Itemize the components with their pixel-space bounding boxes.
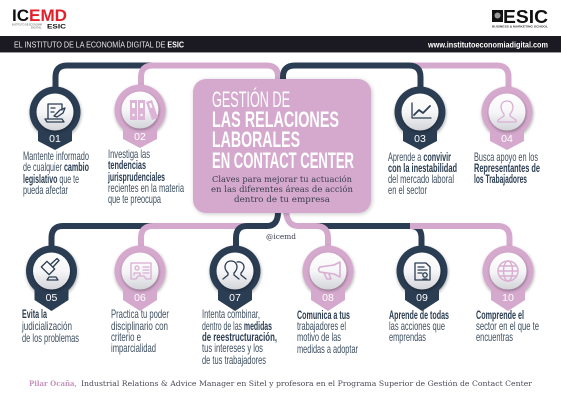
text 07 <box>202 308 277 367</box>
text 10: Comprende el <box>476 309 524 322</box>
text 03: Aprende a convivir <box>388 151 451 164</box>
text 01: Mantente informado <box>23 150 89 163</box>
text 07: Intenta combinar, <box>202 308 260 321</box>
icon: line chart <box>412 103 431 118</box>
text 03: del mercado laboral <box>388 173 454 186</box>
text 01: de cualquier cambio <box>23 161 89 174</box>
subtitle <box>211 174 353 205</box>
text 08: motivo de las <box>297 331 341 344</box>
header band <box>0 36 561 53</box>
icon: id card <box>131 263 151 279</box>
step 03 <box>394 86 446 150</box>
step 10 <box>482 246 534 311</box>
text 08: trabajadores el <box>297 320 346 333</box>
icon: globe <box>498 261 518 281</box>
text 09: las acciones que <box>389 320 445 333</box>
connector lines <box>52 66 510 250</box>
text 01 <box>23 150 89 197</box>
panel: central title <box>193 79 371 213</box>
icon: certificate document <box>415 263 430 280</box>
text 02: Investiga las <box>108 148 150 161</box>
step 04: 04 <box>501 133 513 145</box>
step 02 <box>114 84 166 148</box>
step 05 <box>26 246 77 311</box>
logo: ESIC: ESIC <box>503 7 548 27</box>
text 06: disciplinario con <box>111 320 168 333</box>
text 03: con la inestabilidad <box>388 162 457 175</box>
step 06: 06 <box>134 292 146 304</box>
text 10 <box>476 309 539 344</box>
logo: ICEMD: INSTITUTO DE ECONOMÍA <box>12 22 42 26</box>
icon: person <box>498 101 516 122</box>
step 08: 08 <box>322 292 334 304</box>
step 08 <box>302 246 354 311</box>
logo: ICEMD: DIGITAL <box>31 26 42 30</box>
footer credit: Industrial Relations & Advice Manager en Sitel y profesora en el Programa Superior de Gestión de Contact Center <box>81 379 532 388</box>
step 06 <box>114 246 166 311</box>
text 03 <box>388 151 457 197</box>
icon: gavel <box>41 258 59 280</box>
step 01: 01 <box>49 133 61 145</box>
text 06 <box>111 308 169 355</box>
text 02: jurisprudenciales <box>107 171 165 184</box>
text 02 <box>107 148 184 206</box>
subtitle: dentro de tu empresa <box>234 195 330 205</box>
text 07: dentro de las medidas <box>202 320 272 333</box>
text 02: recientes en la materia <box>108 182 184 195</box>
footer credit: Pilar Ocaña, <box>29 379 77 388</box>
step 10: 10 <box>502 292 514 304</box>
text 06: Practica tu poder <box>111 308 169 321</box>
text 06: imparcialidad <box>111 342 156 355</box>
icon: document with quill <box>45 104 65 122</box>
step 07 <box>210 246 260 311</box>
heading <box>212 87 354 173</box>
heading: LAS RELACIONES <box>212 107 339 132</box>
logo: ESIC: BUSINESS & MARKETING SCHOOL <box>492 24 548 28</box>
text 07: de tus trabajadores <box>202 354 266 367</box>
subtitle: en las diferentes áreas de acción <box>211 184 353 195</box>
logo: ICEMD: ESIC <box>47 24 67 30</box>
logo: ICEMD: ICEMD <box>12 6 67 25</box>
text 05: judicialización <box>21 320 72 333</box>
text 08: medidas a adoptar <box>297 343 358 356</box>
handle: @icemd <box>266 232 296 241</box>
text 06: criterio e <box>111 331 141 344</box>
step 03: 03 <box>414 133 426 145</box>
header band: EL INSTITUTO DE LA ECONOMÍA DIGITAL DE ESIC <box>14 40 184 50</box>
icon: two people <box>223 261 246 279</box>
step 07: 07 <box>229 292 241 304</box>
step 04 <box>482 86 532 150</box>
text 05: Evita la <box>22 308 47 321</box>
subtitle: Claves para mejorar tu actuación <box>212 174 352 185</box>
step 05: 05 <box>46 292 57 304</box>
text 09: emprendas <box>389 331 426 344</box>
icon: megaphone <box>318 262 340 279</box>
text 02: tendencias <box>108 159 146 172</box>
step 02: 02 <box>134 131 146 143</box>
icon: binders <box>130 100 158 120</box>
text 05: de los problemas <box>22 332 79 345</box>
text 01: pueda afectar <box>23 184 68 197</box>
step 09 <box>396 246 448 311</box>
step 09: 09 <box>416 292 428 304</box>
text 05 <box>21 308 79 345</box>
text 02: que te preocupa <box>108 193 161 206</box>
text 09: Aprende de todas <box>389 309 449 322</box>
text 04 <box>474 151 540 186</box>
text 07: de reestructuración, <box>202 331 277 344</box>
heading: EN CONTACT CENTER <box>212 148 354 173</box>
heading: LABORALES <box>212 127 300 152</box>
text 03: en el sector <box>388 184 427 197</box>
text 08: Comunica a tus <box>297 309 350 322</box>
step 01 <box>30 86 80 150</box>
text 07: tus intereses y los <box>202 342 263 355</box>
logo: ESIC <box>492 7 548 28</box>
text 09 <box>389 309 449 344</box>
text 10: encuentras <box>476 331 513 344</box>
heading: GESTIÓN DE <box>212 87 290 112</box>
text 08 <box>297 309 358 356</box>
text 01: legislativo que te <box>23 173 79 186</box>
